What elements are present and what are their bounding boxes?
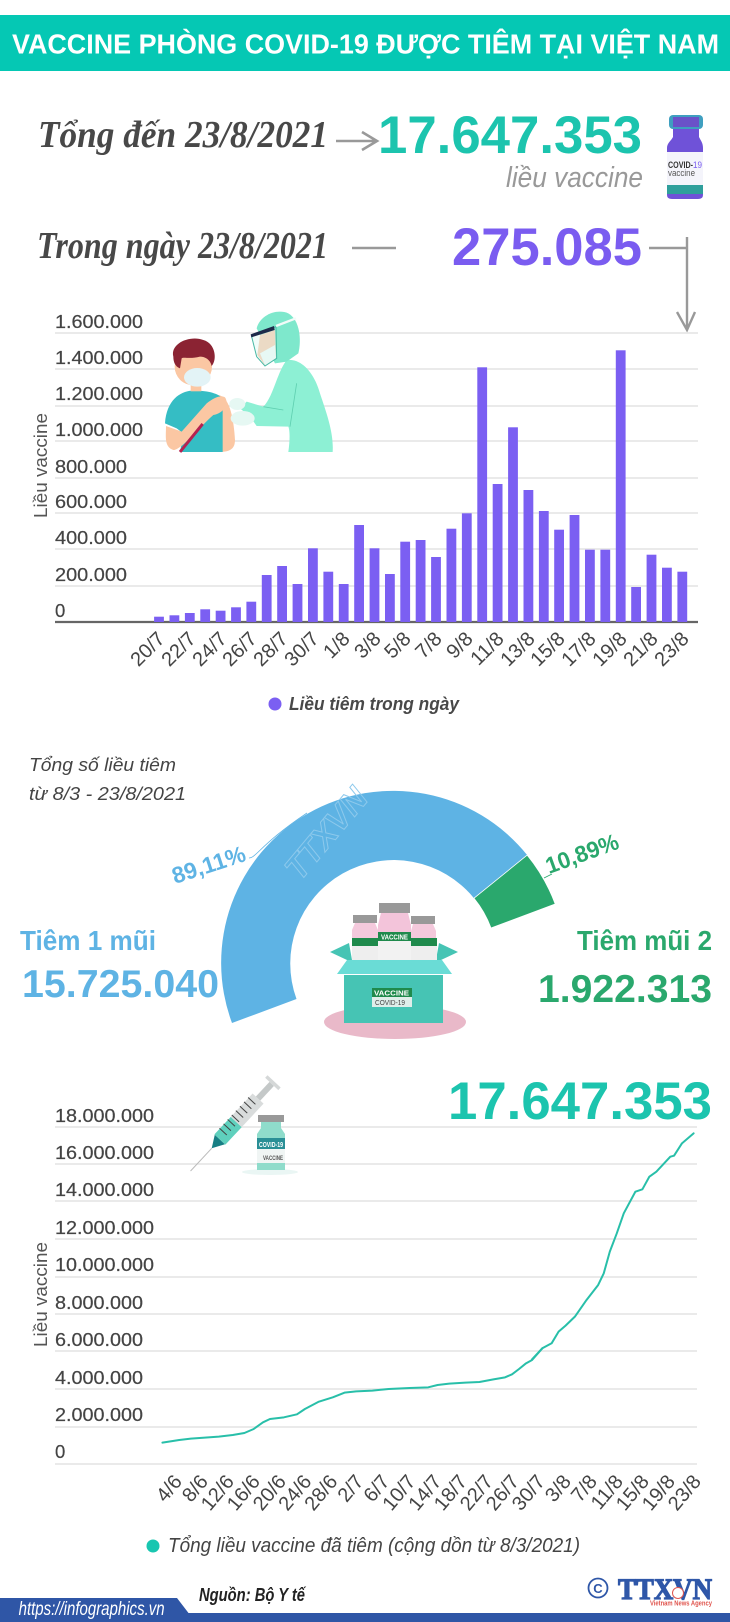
source: Nguồn: Bộ Y tế — [199, 1585, 307, 1605]
vial center — [378, 903, 411, 960]
x axis labels: 15/8 — [612, 1471, 654, 1515]
x axis labels: 19/8 — [588, 628, 632, 671]
x axis labels: 12/6 — [197, 1471, 239, 1515]
x axis labels: 11/8 — [587, 1471, 628, 1514]
y axis labels: 400.000 — [55, 527, 127, 548]
x axis labels: 15/8 — [526, 628, 570, 671]
icon: vaccine vial: 19 — [693, 160, 702, 170]
x axis labels: 26/7 — [218, 628, 262, 671]
x axis labels: 17/8 — [557, 628, 601, 671]
y axis labels: 6.000.000 — [55, 1329, 143, 1350]
icon: syringe — [184, 1075, 281, 1177]
x axis labels — [126, 628, 694, 671]
icon: vaccine box — [324, 903, 466, 1039]
gauge chart: first vs second dose — [169, 779, 622, 1023]
daily label: Trong ngày 23/8/2021 — [37, 225, 328, 267]
second dose label: Tiêm mũi 2 — [577, 925, 712, 956]
second dose label — [538, 925, 712, 1011]
x axis labels: 20/7 — [126, 628, 170, 671]
first dose percent: 89,11% — [169, 841, 249, 889]
x axis labels: 3/8 — [541, 1471, 576, 1507]
cumulative total number: 17.647.353 — [448, 1072, 712, 1131]
daily number: 275.085 — [452, 218, 642, 277]
y axis labels: 12.000.000 — [55, 1217, 154, 1238]
x axis labels: 30/7 — [280, 628, 324, 671]
y axis labels: 10.000.000 — [55, 1254, 154, 1275]
footer bar — [0, 1598, 730, 1622]
y axis labels — [55, 311, 143, 621]
x axis labels: 7/8 — [411, 628, 447, 663]
x axis labels: 1/8 — [319, 628, 355, 663]
logo: TTXVN: Vietnam News Agency — [650, 1598, 713, 1608]
total label: Tổng đến 23/8/2021 — [38, 114, 328, 156]
y axis labels: 14.000.000 — [55, 1179, 154, 1200]
second dose arc — [474, 855, 555, 928]
x axis labels: 30/7 — [508, 1471, 550, 1515]
x axis labels: 14/7 — [404, 1471, 446, 1515]
x axis labels: 28/6 — [300, 1471, 342, 1515]
y axis labels: 8.000.000 — [55, 1292, 143, 1313]
section caption: từ 8/3 - 23/8/2021 — [29, 783, 186, 804]
y axis labels: 1.400.000 — [55, 347, 143, 368]
connector line — [352, 247, 396, 249]
icon: vaccine vial: vaccine — [668, 168, 695, 178]
x axis labels: 24/6 — [274, 1471, 316, 1515]
y axis title: Liều vaccine — [31, 413, 51, 518]
logo: TTXVN: C — [593, 1581, 603, 1596]
y axis title: Liều vaccine — [31, 1242, 51, 1347]
watermark: TTXVN — [277, 779, 376, 886]
first dose label: Tiêm 1 mũi — [20, 925, 156, 956]
x axis labels — [152, 1471, 706, 1515]
y axis labels: 0 — [55, 1441, 65, 1462]
x axis labels: 13/8 — [496, 628, 540, 671]
x axis labels: 16/6 — [223, 1471, 265, 1515]
vial right — [411, 916, 437, 960]
box label: VACCINE — [374, 988, 409, 998]
y axis labels: 200.000 — [55, 564, 127, 585]
arrow to chart — [649, 237, 695, 330]
y axis labels — [55, 1105, 154, 1462]
legend: cumulative doses: Tổng liều vaccine đã tiêm (cộng dồn từ 8/3/2021) — [168, 1535, 580, 1557]
y axis labels: 2.000.000 — [55, 1404, 143, 1425]
icon: vaccine vial — [667, 115, 703, 199]
icon: small vial: COVID-19 — [259, 1140, 283, 1149]
y axis labels: 1.200.000 — [55, 383, 143, 404]
x axis labels: 20/6 — [249, 1471, 291, 1515]
x axis labels: 28/7 — [249, 628, 293, 671]
y axis labels: 1.000.000 — [55, 419, 143, 440]
y axis labels: 16.000.000 — [55, 1142, 154, 1163]
icon: vaccine vial: COVID- — [668, 160, 693, 170]
y axis labels: 1.600.000 — [55, 311, 143, 332]
section caption — [29, 754, 186, 804]
y axis labels: 800.000 — [55, 456, 127, 477]
illustration: nurse vaccinating patient — [165, 312, 333, 452]
x axis labels: 11/8 — [466, 628, 509, 670]
title banner — [0, 15, 730, 71]
first dose label: 15.725.040 — [22, 963, 219, 1006]
total number: 17.647.353 — [378, 106, 642, 165]
second dose leader — [544, 874, 552, 878]
x axis labels: 2/7 — [334, 1471, 368, 1507]
x axis labels: 10/7 — [378, 1471, 420, 1515]
box label — [372, 988, 412, 1007]
icon: small vial: VACCINE — [263, 1155, 283, 1162]
x axis labels: 26/7 — [482, 1471, 524, 1515]
line chart: cumulative doses — [31, 1105, 706, 1515]
cumulative curve — [162, 1133, 694, 1443]
x axis labels: 22/7 — [456, 1471, 498, 1515]
x axis labels: 4/6 — [152, 1471, 187, 1507]
x axis labels: 18/7 — [430, 1471, 472, 1515]
legend: daily doses: Liều tiêm trong ngày — [289, 694, 460, 714]
vial center: VACCINE — [381, 934, 408, 942]
x axis labels: 6/7 — [360, 1471, 394, 1507]
logo: TTXVN — [588, 1573, 713, 1608]
x axis labels: 5/8 — [380, 628, 416, 663]
y axis labels: 0 — [55, 600, 65, 621]
vial left — [352, 915, 378, 960]
x axis labels: 22/7 — [157, 628, 201, 671]
y axis labels: 4.000.000 — [55, 1367, 143, 1388]
box label: COVID-19 — [375, 1000, 405, 1007]
first dose arc — [221, 791, 527, 1023]
second dose label: 1.922.313 — [538, 968, 712, 1011]
footer bar: https://infographics.vn — [19, 1599, 165, 1620]
icon: small vial — [242, 1115, 298, 1175]
x axis labels: 8/6 — [178, 1471, 213, 1507]
bar chart: daily doses — [31, 311, 698, 671]
second dose percent: 10,89% — [542, 828, 622, 879]
y axis labels: 600.000 — [55, 491, 127, 512]
logo: TTXVN: TTXVN — [618, 1573, 712, 1606]
title banner: VACCINE PHÒNG COVID-19 ĐƯỢC TIÊM TẠI VIỆT NAM — [12, 28, 719, 60]
x axis labels: 19/8 — [638, 1471, 680, 1515]
section caption: Tổng số liều tiêm — [29, 754, 176, 775]
arrow to total — [336, 132, 377, 150]
bars — [154, 350, 687, 622]
first dose label — [20, 925, 219, 1006]
x axis labels: 23/8 — [664, 1471, 706, 1515]
unit label: liều vaccine — [506, 162, 643, 194]
first dose leader — [249, 813, 307, 858]
y axis labels: 18.000.000 — [55, 1105, 154, 1126]
x axis labels: 24/7 — [188, 628, 232, 671]
x axis labels: 9/8 — [442, 628, 478, 663]
x axis labels: 3/8 — [350, 628, 386, 663]
x axis labels: 21/8 — [619, 628, 663, 671]
x axis labels: 23/8 — [650, 628, 694, 671]
x axis labels: 7/8 — [567, 1471, 602, 1507]
